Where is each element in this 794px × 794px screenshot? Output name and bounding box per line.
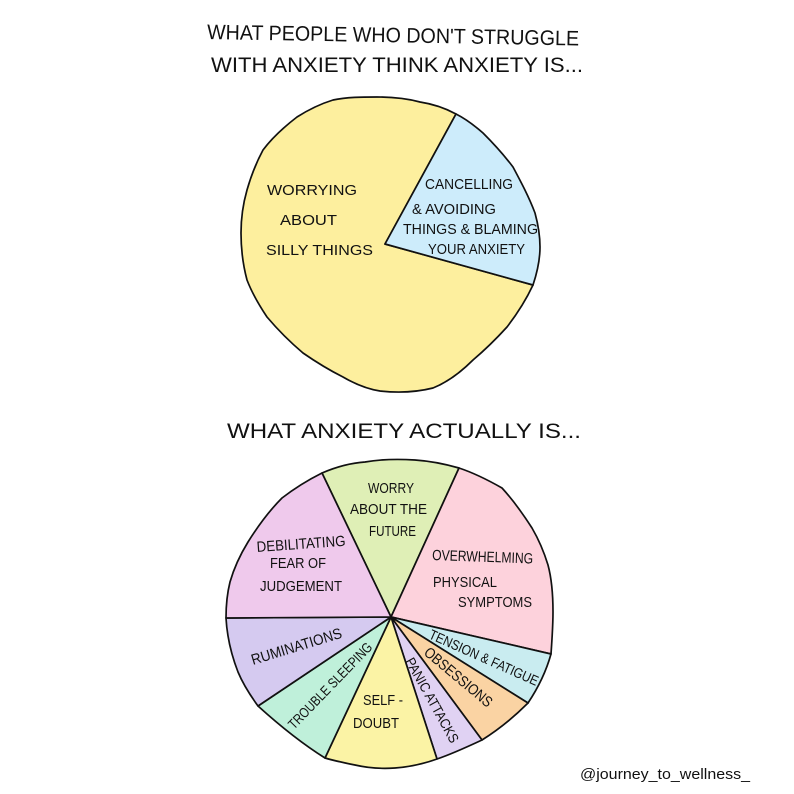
- label: cancelling and avoiding: CANCELLING: [425, 176, 513, 193]
- slice: overwhelming physical symptoms: [391, 468, 553, 654]
- label: self-doubt: DOUBT: [353, 715, 399, 732]
- label: overwhelming physical symptoms: [432, 547, 533, 611]
- slice: worry about the future: [322, 459, 459, 617]
- label: trouble sleeping: TROUBLE SLEEPING: [285, 639, 375, 732]
- label: worrying about silly things: [266, 182, 373, 259]
- title: top heading: WHAT PEOPLE WHO DON'T STRUGGLE: [207, 21, 579, 50]
- label: overwhelming physical symptoms: PHYSICAL: [433, 574, 497, 591]
- label: debilitating fear of judgement: [256, 533, 346, 595]
- label: overwhelming physical symptoms: SYMPTOMS: [458, 594, 532, 611]
- label: worry about the future: WORRY: [368, 480, 414, 497]
- label: tension and fatigue: TENSION & FATIGUE: [427, 626, 541, 689]
- slice: obsessions: [391, 617, 528, 740]
- label: worry about the future: [350, 480, 427, 540]
- slice: trouble sleeping: [258, 617, 391, 758]
- label: debilitating fear of judgement: JUDGEMENT: [260, 578, 342, 595]
- heading: what anxiety actually is: WHAT ANXIETY ACTUALLY IS...: [227, 420, 581, 443]
- title: top heading: [207, 21, 583, 77]
- label: self-doubt: [353, 692, 403, 732]
- label: obsessions: OBSESSIONS: [420, 644, 496, 711]
- label: worrying about silly things: WORRYING: [267, 182, 357, 199]
- title: top heading: WITH ANXIETY THINK ANXIETY IS...: [211, 54, 583, 77]
- credit: handle: @journey_to_wellness_: [580, 766, 751, 783]
- label: debilitating fear of judgement: DEBILITATING: [256, 533, 346, 556]
- label: cancelling and avoiding: THINGS & BLAMING: [403, 221, 538, 238]
- label: cancelling and avoiding: YOUR ANXIETY: [428, 241, 525, 258]
- label: worry about the future: ABOUT THE: [350, 501, 427, 518]
- label: overwhelming physical symptoms: OVERWHELMING: [432, 547, 533, 568]
- slice: ruminations: [226, 617, 391, 706]
- label: cancelling and avoiding: [403, 176, 538, 258]
- label: cancelling and avoiding: & AVOIDING: [412, 201, 496, 218]
- pie chart: what people think anxiety is: [241, 97, 540, 392]
- label: worrying about silly things: SILLY THINGS: [266, 242, 373, 259]
- label: worrying about silly things: ABOUT: [280, 212, 337, 229]
- label: worry about the future: FUTURE: [369, 523, 416, 540]
- slice: debilitating fear of judgement: [226, 473, 391, 618]
- slice: worrying about silly things: [241, 97, 533, 392]
- slice: cancelling and avoiding: [385, 114, 540, 285]
- slice: panic attacks: [391, 617, 482, 759]
- label: self-doubt: SELF -: [363, 692, 403, 709]
- label: panic attacks: PANIC ATTACKS: [402, 655, 462, 746]
- label: debilitating fear of judgement: FEAR OF: [270, 555, 326, 572]
- label: ruminations: RUMINATIONS: [249, 625, 344, 669]
- slice: tension and fatigue: [391, 617, 551, 703]
- pie chart: what anxiety actually is: [226, 459, 553, 768]
- slice: self-doubt: [325, 617, 437, 768]
